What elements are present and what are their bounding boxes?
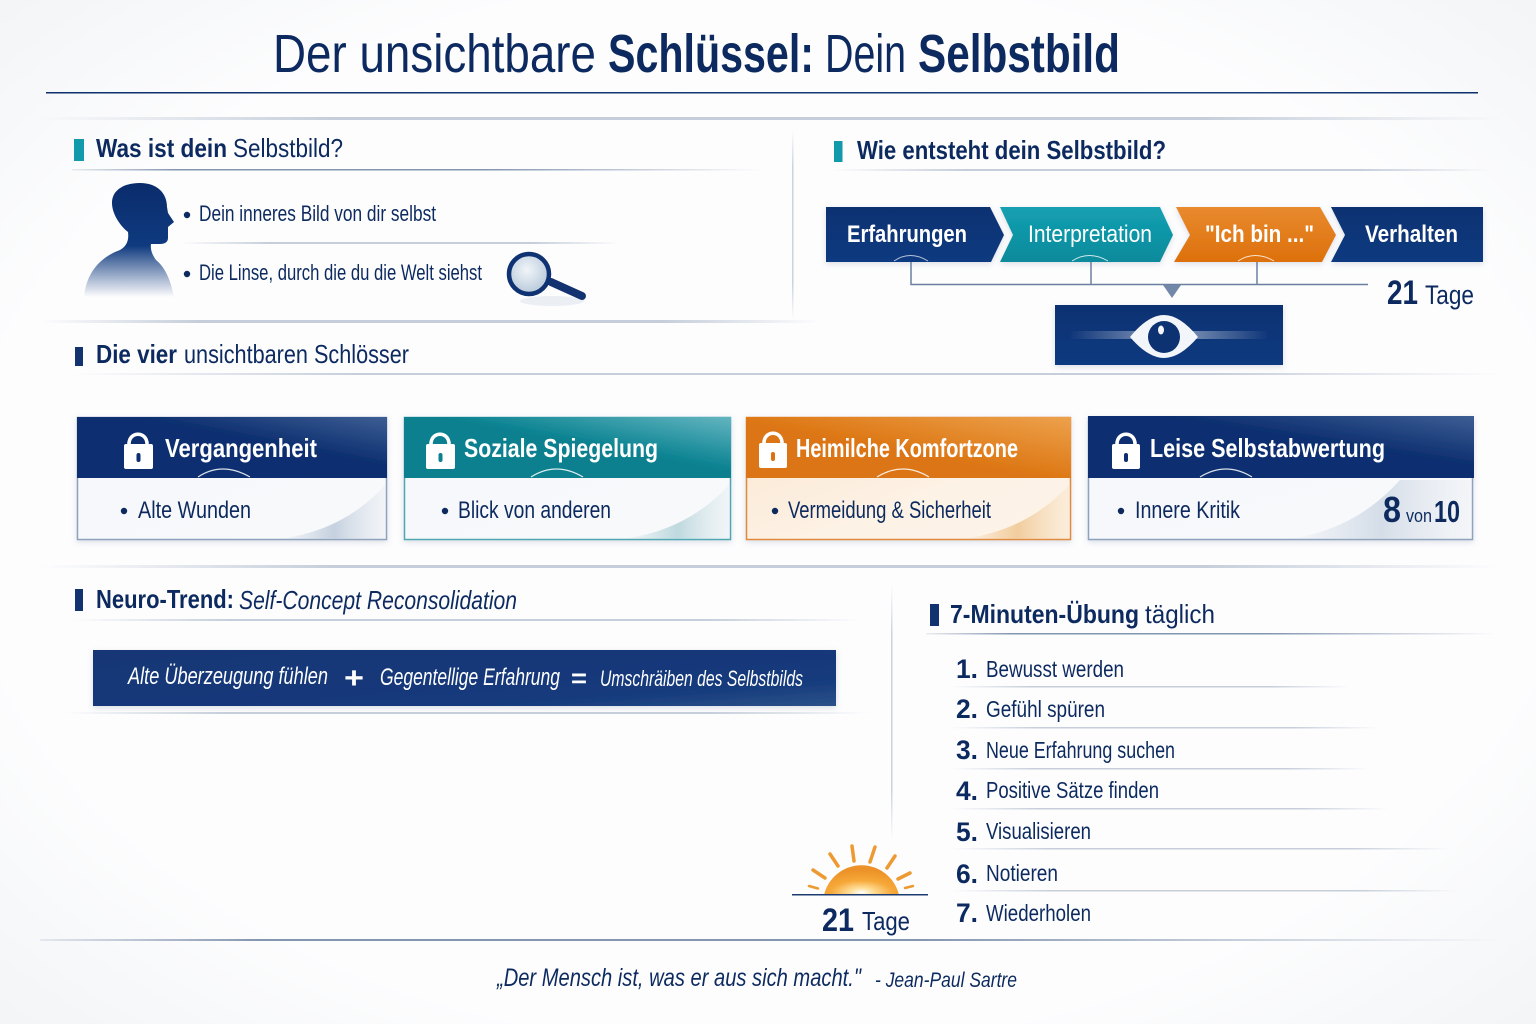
icon: lock (426, 434, 455, 469)
text: 21 Tage sunrise: 21 (822, 902, 854, 938)
panel: Vergangenheit card: Alte Wunden (138, 497, 251, 524)
arrow: down triangle (1163, 285, 1181, 298)
step 1 (956, 654, 1124, 684)
step 2 (956, 694, 1105, 724)
panel: Leise Selbstabwertung card: Leise Selbstabwertung (1150, 433, 1385, 463)
heading: Die vier unsichtbaren Schlösser: Die vier (96, 339, 177, 369)
arrow: Ich bin (1174, 207, 1336, 262)
heading: Neuro-Trend: Neuro-Trend: (96, 584, 234, 614)
heading: Neuro-Trend (75, 584, 517, 615)
heading: Neuro-Trend: Self-Concept Reconsolidation (239, 585, 517, 615)
icon: eye box (1055, 305, 1283, 365)
banner: formula: + (344, 662, 364, 695)
text: 21 Tage sunrise: Tage (862, 906, 910, 936)
banner: formula: Alte Überzeugung fühlen (126, 663, 328, 690)
heading: Was ist dein Selbstbild: Was ist dein (96, 133, 227, 163)
text: 21 Tage: Tage (1425, 280, 1474, 310)
banner: formula (93, 650, 836, 706)
text: bullet 2: Die Linse, durch die du die Welt siehst (199, 260, 482, 285)
step 2: 2. (956, 694, 978, 724)
panel: Soziale Spiegelung card: Soziale Spiegelung (464, 433, 658, 463)
text: bullet 1: Dein inneres Bild von dir selbst (199, 201, 436, 226)
panel: Leise Selbstabwertung card: Innere Kritik (1135, 497, 1241, 524)
stat: 8 von 10 (1383, 489, 1460, 530)
banner: formula: Umschräiben des Selbstbilds (600, 666, 803, 691)
arrow: Verhalten: Verhalten (1365, 221, 1458, 248)
icon: lock (759, 433, 787, 468)
title: Der unsichtbare (273, 24, 596, 84)
step 6: Notieren (986, 860, 1058, 886)
step 5: 5. (956, 817, 978, 847)
panel: Heimliche Komfortzone card: Heimilche Komfortzone (796, 433, 1018, 463)
icon: magnifying glass (509, 254, 584, 306)
title: Dein (825, 24, 906, 84)
step 3 (956, 735, 1175, 765)
arrow: Erfahrungen (826, 207, 1004, 262)
banner: formula: Gegentellige Erfahrung (380, 664, 560, 691)
stat: 8 von 10: 8 (1383, 489, 1401, 530)
icon: person silhouette (84, 183, 174, 297)
step 4: Positive Sätze finden (986, 777, 1159, 803)
panel: Neuro-Trend (65, 584, 870, 714)
step 5 (956, 817, 1091, 847)
panel: Vergangenheit card (77, 417, 387, 540)
arrow: Erfahrungen: Erfahrungen (847, 221, 967, 248)
step 3: Neue Erfahrung suchen (986, 737, 1175, 763)
panel: Soziale Spiegelung card (404, 417, 731, 540)
icon: lock (1112, 434, 1140, 469)
arrow: Ich bin: "Ich bin ..." (1205, 221, 1314, 248)
heading: Wie entsteht dein Selbstbild: Wie entsteht dein Selbstbild? (857, 135, 1166, 165)
step 1: 1. (956, 654, 978, 684)
step 3: 3. (956, 735, 978, 765)
panel: 7-Minuten-Übung (926, 599, 1496, 928)
panel: Leise Selbstabwertung card (1088, 416, 1474, 540)
step 5: Visualisieren (986, 818, 1091, 844)
stat: 8 von 10: von (1406, 506, 1432, 526)
heading: 7-Minuten-Übung: täglich (1145, 599, 1215, 629)
step 6 (956, 859, 1058, 889)
title: Schlüssel: (608, 24, 814, 84)
panel: Heimliche Komfortzone card: Vermeidung & Sicherheit (788, 497, 991, 524)
title: Selbstbild (918, 24, 1120, 84)
step 4 (956, 776, 1159, 806)
heading: Was ist dein Selbstbild: Selbstbild? (233, 133, 343, 163)
title (273, 24, 1120, 84)
step 6: 6. (956, 859, 978, 889)
step 1: Bewusst werden (986, 656, 1124, 682)
connector lines (911, 262, 1368, 284)
panel: Heimliche Komfortzone card (746, 417, 1071, 540)
step 2: Gefühl spüren (986, 696, 1105, 722)
text: 21 Tage: 21 (1387, 274, 1418, 312)
quote: - Jean-Paul Sartre (875, 969, 1017, 992)
text: 21 Tage (1387, 274, 1474, 312)
icon: rising sun (792, 846, 928, 896)
banner: formula: = (571, 663, 587, 693)
text: 21 Tage sunrise (822, 902, 910, 938)
quote: „Der Mensch ist, was er aus sich macht." (496, 964, 862, 992)
panel: Vergangenheit card: Vergangenheit (165, 433, 317, 463)
step 7: Wiederholen (986, 900, 1091, 926)
panel: Soziale Spiegelung card: Blick von anderen (458, 497, 611, 524)
panel: Wie entsteht dein Selbstbild (826, 135, 1492, 365)
heading: 7-Minuten-Übung: 7-Minuten-Übung (950, 599, 1139, 629)
stat: 8 von 10: 10 (1434, 494, 1460, 529)
icon: lock (124, 434, 153, 469)
arrow: Interpretation: Interpretation (1028, 221, 1152, 248)
arrow: Interpretation (1000, 207, 1173, 262)
step 7 (956, 898, 1091, 928)
step 7: 7. (956, 898, 978, 928)
panel: Was ist dein Selbstbild (72, 133, 762, 306)
heading: Was ist dein Selbstbild (74, 133, 343, 163)
arrow: Verhalten (1331, 207, 1483, 262)
heading: Die vier unsichtbaren Schlösser (75, 339, 409, 369)
heading: Die vier unsichtbaren Schlösser: unsichtbaren Schlösser (184, 339, 409, 369)
step 4: 4. (956, 776, 978, 806)
